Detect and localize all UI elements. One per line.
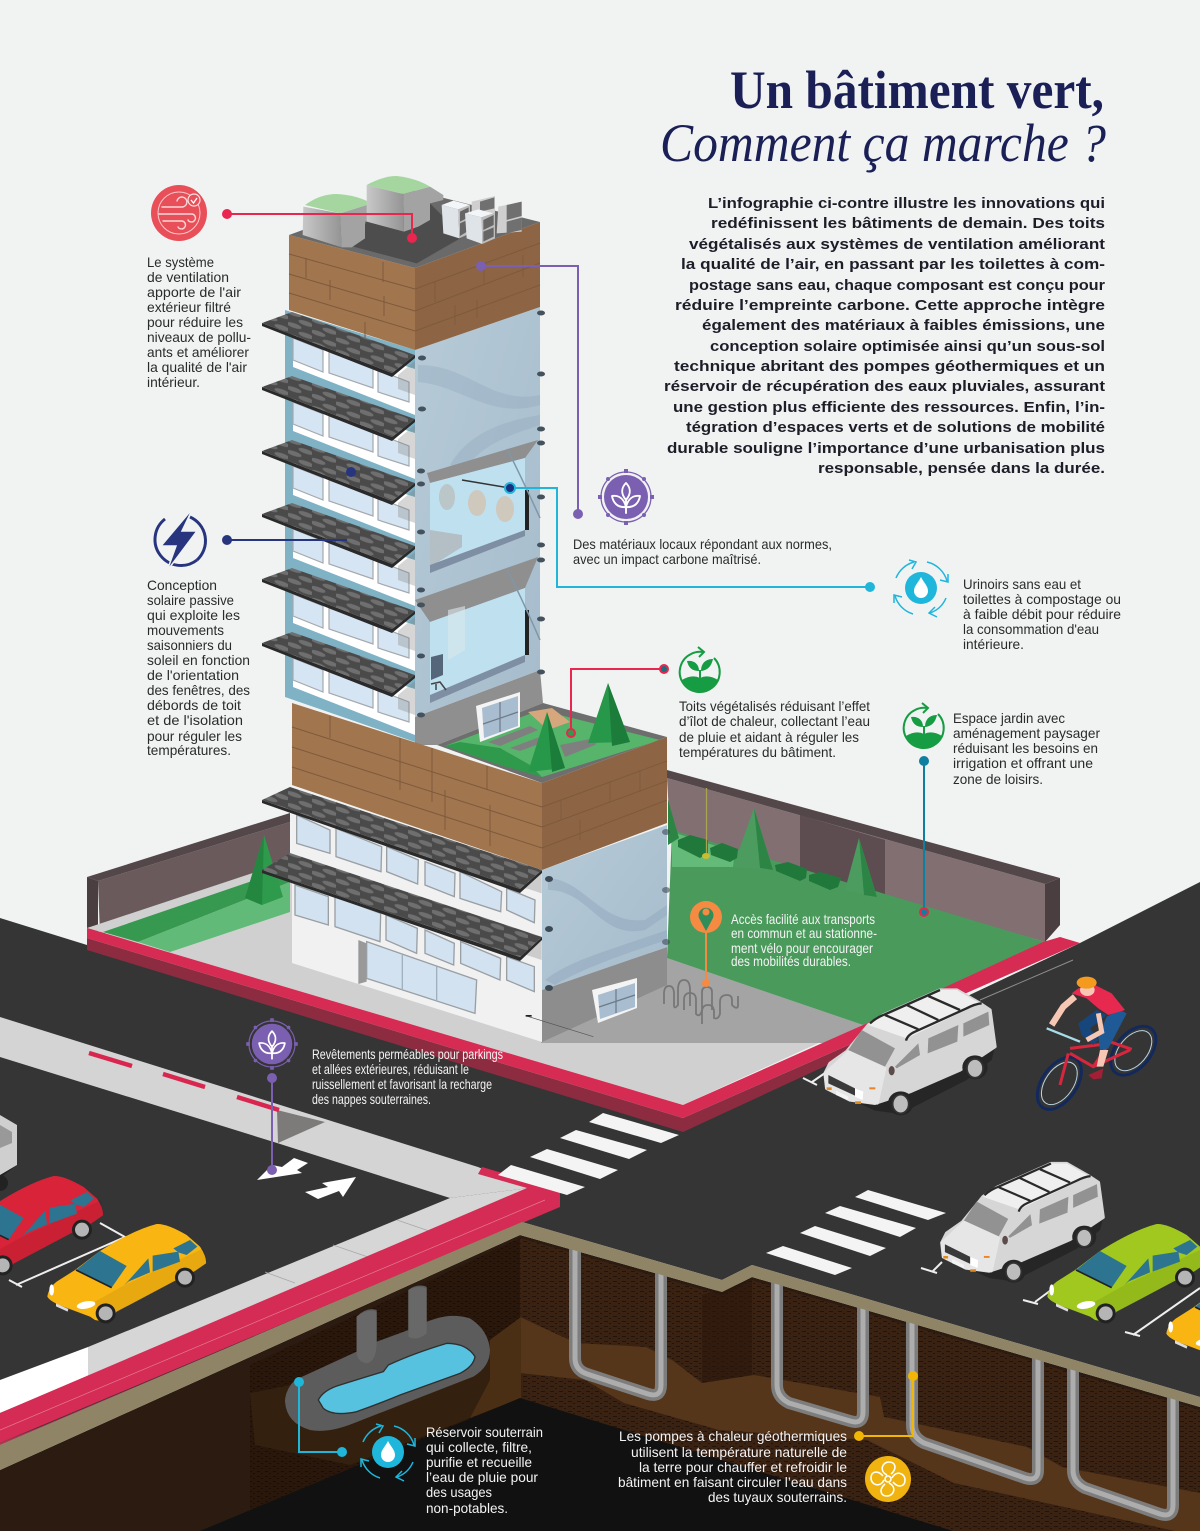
- office chair: [431, 654, 446, 690]
- connector: permeable paving: [267, 1073, 277, 1175]
- connector: green roof: [567, 665, 668, 737]
- icon: fan: [865, 1456, 911, 1502]
- text: green roof: Toits végétalisés réduisant l’effet: [679, 698, 870, 714]
- lower block: brick band: [292, 703, 667, 870]
- text: water saving: [963, 576, 1121, 652]
- text: passive solar: saisonniers du: [147, 637, 232, 653]
- text: rainwater tank: l’eau de pluie pour: [426, 1469, 538, 1485]
- lawn left: [103, 835, 290, 952]
- sidewalk lower strip: [0, 1188, 529, 1413]
- connector: mobility: [702, 925, 710, 987]
- text: garden: irrigation et offrant une: [953, 755, 1093, 771]
- text: ventilation: apporte de l'air: [147, 284, 241, 300]
- roof window: [476, 692, 520, 742]
- text: mobility: en commun et au stationne-: [731, 925, 877, 941]
- text: passive solar: Conception: [147, 577, 217, 593]
- roof garden planting: [445, 710, 660, 777]
- hedges: [678, 835, 841, 890]
- text: garden: zone de loisirs.: [953, 771, 1043, 787]
- intro paragraph: conception solaire optimisée ainsi qu’un sous-sol: [710, 338, 1105, 355]
- icon: garden leaf: [904, 703, 944, 748]
- road surface: [0, 882, 1200, 1445]
- text: passive solar: pour réguler les: [147, 728, 242, 744]
- concrete lot: [87, 860, 860, 1105]
- van lower: [942, 1163, 1103, 1283]
- intro paragraph: technique abritant des pompes géothermiques et un: [674, 358, 1105, 375]
- text: garden: [953, 710, 1100, 787]
- intro paragraph: la qualité de l’air, en passant par les toilettes à com-: [681, 256, 1105, 273]
- connector: passive solar: [222, 467, 356, 545]
- intro paragraph: réservoir de récupération des eaux pluviales, assurant: [664, 378, 1105, 395]
- text: permeable paving: Revêtements perméables pour parkings: [312, 1046, 503, 1062]
- connector: garden: [919, 756, 929, 916]
- icon: purple plant paving: [246, 1018, 298, 1070]
- underground soil: [0, 1235, 1200, 1531]
- text: passive solar: des fenêtres, des: [147, 682, 250, 698]
- lower louvre 1: [262, 787, 542, 893]
- icon: water cycle tank: [361, 1424, 415, 1481]
- text: ventilation: de ventilation: [147, 269, 229, 285]
- text: rainwater tank: des usages: [426, 1484, 492, 1500]
- bike rack: [664, 980, 738, 1024]
- text: water saving: Urinoirs sans eau et: [963, 576, 1081, 592]
- intro paragraph: une gestion plus efficiente des ressources. Enfin, l’in-: [673, 399, 1105, 416]
- back wall left: [87, 813, 290, 935]
- van upper: [825, 990, 995, 1115]
- shaded concrete beside building: [541, 958, 863, 1043]
- text: garden: Espace jardin avec: [953, 710, 1065, 726]
- text: materials: [573, 536, 832, 567]
- text: geothermal: des tuyaux souterrains.: [708, 1489, 847, 1505]
- tower: top brick block: [289, 222, 540, 350]
- title: [660, 60, 1106, 173]
- text: passive solar: et de l'isolation: [147, 712, 243, 728]
- text: passive solar: de l'orientation: [147, 667, 239, 683]
- text: permeable paving: des nappes souterraines.: [312, 1091, 431, 1107]
- text: ventilation: Le système: [147, 254, 214, 270]
- text: water saving: intérieure.: [963, 636, 1024, 652]
- intro paragraph: végétalisés aux systèmes de ventilation améliorant: [689, 236, 1105, 253]
- text: geothermal: bâtiment en faisant circuler l’eau dans: [618, 1474, 847, 1490]
- tower: roof with equipment: [289, 176, 540, 268]
- ventilation duct left: [303, 194, 382, 247]
- intro paragraph: réduire l’empreinte carbone. Cette approche intègre: [675, 297, 1105, 314]
- text: passive solar: [147, 577, 250, 758]
- text: mobility: [731, 911, 877, 969]
- road markings: crosswalks: [498, 1113, 946, 1275]
- road edge tan: [0, 1222, 1200, 1470]
- intro paragraph: L’infographie ci-contre illustre les innovations qui: [708, 195, 1105, 212]
- text: rainwater tank: purifie et recueille: [426, 1454, 532, 1470]
- basement window: [592, 978, 637, 1023]
- text: green roof: de pluie et aidant à réguler les: [679, 729, 859, 745]
- intro paragraph: redéfinissent les bâtiments de demain. Des toits: [711, 215, 1105, 232]
- text: geothermal: Les pompes à chaleur géothermiques: [619, 1428, 847, 1444]
- lower block: windows and door: [295, 815, 593, 1037]
- icon: purple plant materials: [598, 469, 654, 525]
- cyclist: [1028, 977, 1165, 1117]
- text: materials: avec un impact carbone maîtrisé.: [573, 551, 761, 567]
- connector: ventilation: [222, 209, 417, 243]
- icon: green roof leaf: [680, 647, 720, 692]
- text: rainwater tank: qui collecte, filtre,: [426, 1439, 532, 1455]
- curb red around lot: [87, 928, 1080, 1132]
- text: ventilation: niveaux de pollu-: [147, 329, 251, 345]
- urinals: [439, 484, 514, 522]
- text: green roof: températures du bâtiment.: [679, 744, 836, 760]
- lawn right: [667, 788, 1062, 1025]
- text: permeable paving: [312, 1046, 503, 1107]
- text: water saving: la consommation d'eau: [963, 621, 1099, 637]
- text: mobility: ment vélo pour encourager: [731, 940, 873, 956]
- text: passive solar: températures.: [147, 742, 231, 758]
- connector: water saving: [505, 483, 875, 592]
- intro paragraph: également des matériaux à faibles émissions, une: [702, 317, 1105, 334]
- text: passive solar: qui exploite les: [147, 607, 240, 623]
- curb red front: [0, 1167, 560, 1445]
- tree in lawn, rear right: [845, 838, 877, 897]
- text: green roof: [679, 698, 870, 760]
- rainwater tank: [285, 1286, 490, 1431]
- text: passive solar: débords de toit: [147, 697, 241, 713]
- road arrows: [257, 1158, 356, 1199]
- lower room: [415, 557, 540, 703]
- intro paragraph: tégration d’espaces verts et de solutions de mobilité: [686, 419, 1105, 436]
- roof tree 1: [528, 712, 565, 772]
- title: Comment ça marche ?: [660, 113, 1106, 173]
- text: mobility: des mobilités durables.: [731, 953, 851, 969]
- text: ventilation: ants et améliorer: [147, 344, 249, 360]
- text: materials: Des matériaux locaux répondant aux normes,: [573, 536, 832, 552]
- parked cars and vans: [0, 990, 1200, 1360]
- text: geothermal: utilisent la température naturelle de: [631, 1444, 847, 1460]
- tower: south facade: [285, 310, 415, 742]
- roof tree 2: [588, 683, 630, 746]
- lower louvre 2: [262, 853, 542, 961]
- text: green roof: d’îlot de chaleur, collectant l’eau: [679, 713, 870, 729]
- bottom dark wedge: [200, 1398, 953, 1531]
- yellow car right edge: [1166, 1261, 1200, 1360]
- tree in lawn, rear left: [733, 808, 773, 870]
- text: rainwater tank: [426, 1424, 543, 1516]
- icon: wind ventilation: [151, 185, 207, 241]
- intro paragraph: [664, 195, 1105, 477]
- text: permeable paving: ruissellement et favorisant la recharge: [312, 1076, 492, 1092]
- icon: water cycle: [894, 560, 948, 617]
- connector: geothermal: [854, 1371, 918, 1441]
- text: garden: réduisant les besoins en: [953, 740, 1098, 756]
- tree left of building: [245, 835, 283, 905]
- yellow car: [47, 1224, 206, 1323]
- intro paragraph: responsable, pensée dans la durée.: [818, 460, 1105, 477]
- text: rainwater tank: non-potables.: [426, 1500, 508, 1516]
- text: rainwater tank: Réservoir souterrain: [426, 1424, 543, 1440]
- text: water saving: toilettes à compostage ou: [963, 591, 1121, 607]
- text: water saving: à faible débit pour réduire: [963, 606, 1121, 622]
- intro paragraph: postage sans eau, chaque composant est conçu pour: [689, 277, 1105, 294]
- tower: glass wall: [415, 307, 545, 718]
- icon: lightning bolt: [155, 508, 205, 571]
- lower block: green roof: [437, 683, 667, 783]
- text: passive solar: solaire passive: [147, 592, 234, 608]
- intro paragraph: durable souligne l’importance d’une urbanisation plus: [667, 440, 1105, 457]
- text: ventilation: intérieur.: [147, 374, 200, 390]
- tower: gray base below glass: [415, 670, 543, 745]
- connector: materials: [476, 261, 583, 519]
- text: ventilation: pour réduire les: [147, 314, 243, 330]
- text: mobility: Accès facilité aux transports: [731, 911, 875, 927]
- text: garden: aménagement paysager: [953, 725, 1100, 741]
- wooden deck: [528, 708, 570, 730]
- text: permeable paving: et allées extérieures, réduisant le: [312, 1061, 469, 1077]
- geothermal pipes: [575, 1245, 1173, 1515]
- text: ventilation: [147, 254, 251, 390]
- green car: [1047, 1224, 1200, 1323]
- tower: louvres: [262, 312, 415, 697]
- connector: rainwater tank: [294, 1377, 347, 1457]
- text: ventilation: extérieur filtré: [147, 299, 231, 315]
- text: ventilation: la qualité de l'air: [147, 359, 247, 375]
- air handling units: [442, 196, 522, 244]
- title: Un bâtiment vert,: [730, 60, 1104, 120]
- text: geothermal: [618, 1428, 847, 1505]
- text: passive solar: mouvements: [147, 622, 224, 638]
- red car: [0, 1176, 103, 1275]
- text: passive solar: soleil en fonction: [147, 652, 250, 668]
- lower block: glass wall: [542, 825, 670, 991]
- soil layer: sandy band: [520, 1317, 1200, 1531]
- sidewalk upper strip: [0, 1017, 529, 1198]
- lower block: facade: [292, 813, 667, 1042]
- text: geothermal: la terre pour chauffer et refroidir le: [639, 1459, 847, 1475]
- back wall right: [667, 770, 1060, 942]
- upper room: [427, 440, 540, 573]
- van cut at left edge: [0, 1115, 17, 1191]
- parking lines: [9, 1073, 1200, 1336]
- icon: map pin: [690, 901, 722, 933]
- ventilation duct right: [367, 176, 443, 232]
